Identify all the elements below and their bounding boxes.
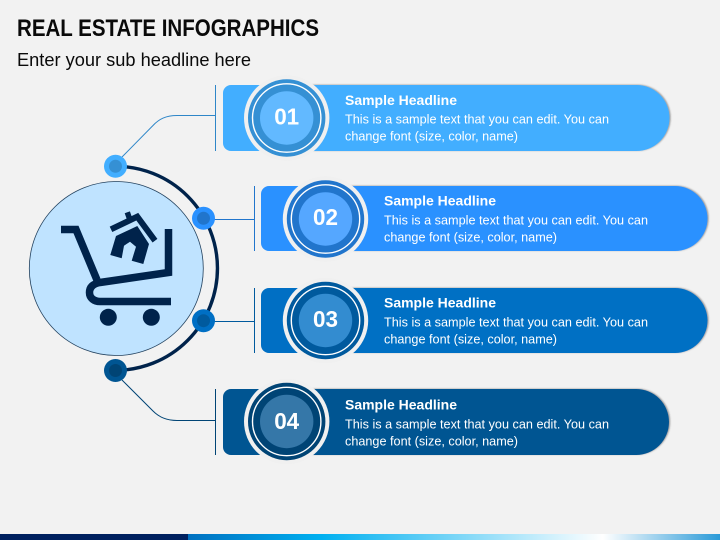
text block 04: Sample Headline	[345, 396, 457, 412]
node 2	[192, 207, 215, 230]
number badge 02	[283, 176, 368, 262]
number badge 01	[244, 75, 329, 161]
number badge 01: 01	[274, 104, 299, 130]
text block 02: Sample Headline	[384, 193, 496, 209]
text block 03: This is a sample text that you can edit. You can	[384, 315, 648, 330]
text block 02: change font (size, color, name)	[384, 230, 557, 245]
text block 01	[345, 92, 609, 144]
connector arc	[116, 166, 217, 370]
panel: item 04	[223, 379, 669, 464]
number badge 02: 02	[313, 204, 338, 230]
connector 1	[122, 85, 216, 157]
node 3	[192, 309, 215, 332]
number badge 03: 03	[313, 306, 338, 332]
panel: item 03	[261, 278, 708, 363]
connector 3	[214, 288, 254, 353]
connector 2	[214, 186, 254, 251]
text block 02: This is a sample text that you can edit. You can	[384, 213, 648, 228]
text block 01: Sample Headline	[345, 92, 457, 108]
text block 04: This is a sample text that you can edit. You can	[345, 416, 609, 432]
text block 04	[345, 396, 609, 449]
node 4	[104, 359, 127, 382]
connector 4	[122, 380, 216, 455]
number badge 03	[283, 278, 368, 363]
text block 01: This is a sample text that you can edit. You can	[345, 112, 609, 127]
subtitle: Enter your sub headline here	[17, 50, 251, 70]
footer bar	[0, 534, 720, 540]
text block 03: Sample Headline	[384, 295, 496, 311]
panel: item 02	[261, 176, 708, 262]
central circle with cart icon	[29, 182, 203, 356]
number badge 04	[244, 379, 329, 464]
number badge 04: 04	[274, 408, 299, 434]
text block 04: change font (size, color, name)	[345, 434, 518, 449]
text block 02	[384, 193, 648, 245]
icon: house	[110, 212, 155, 264]
title: REAL ESTATE INFOGRAPHICS	[17, 15, 319, 42]
icon: shopping cart	[61, 229, 171, 326]
node 1	[104, 155, 127, 178]
text block 03: change font (size, color, name)	[384, 332, 557, 346]
text block 03	[384, 295, 648, 346]
text block 01: change font (size, color, name)	[345, 129, 518, 144]
panel: item 01	[223, 75, 669, 161]
